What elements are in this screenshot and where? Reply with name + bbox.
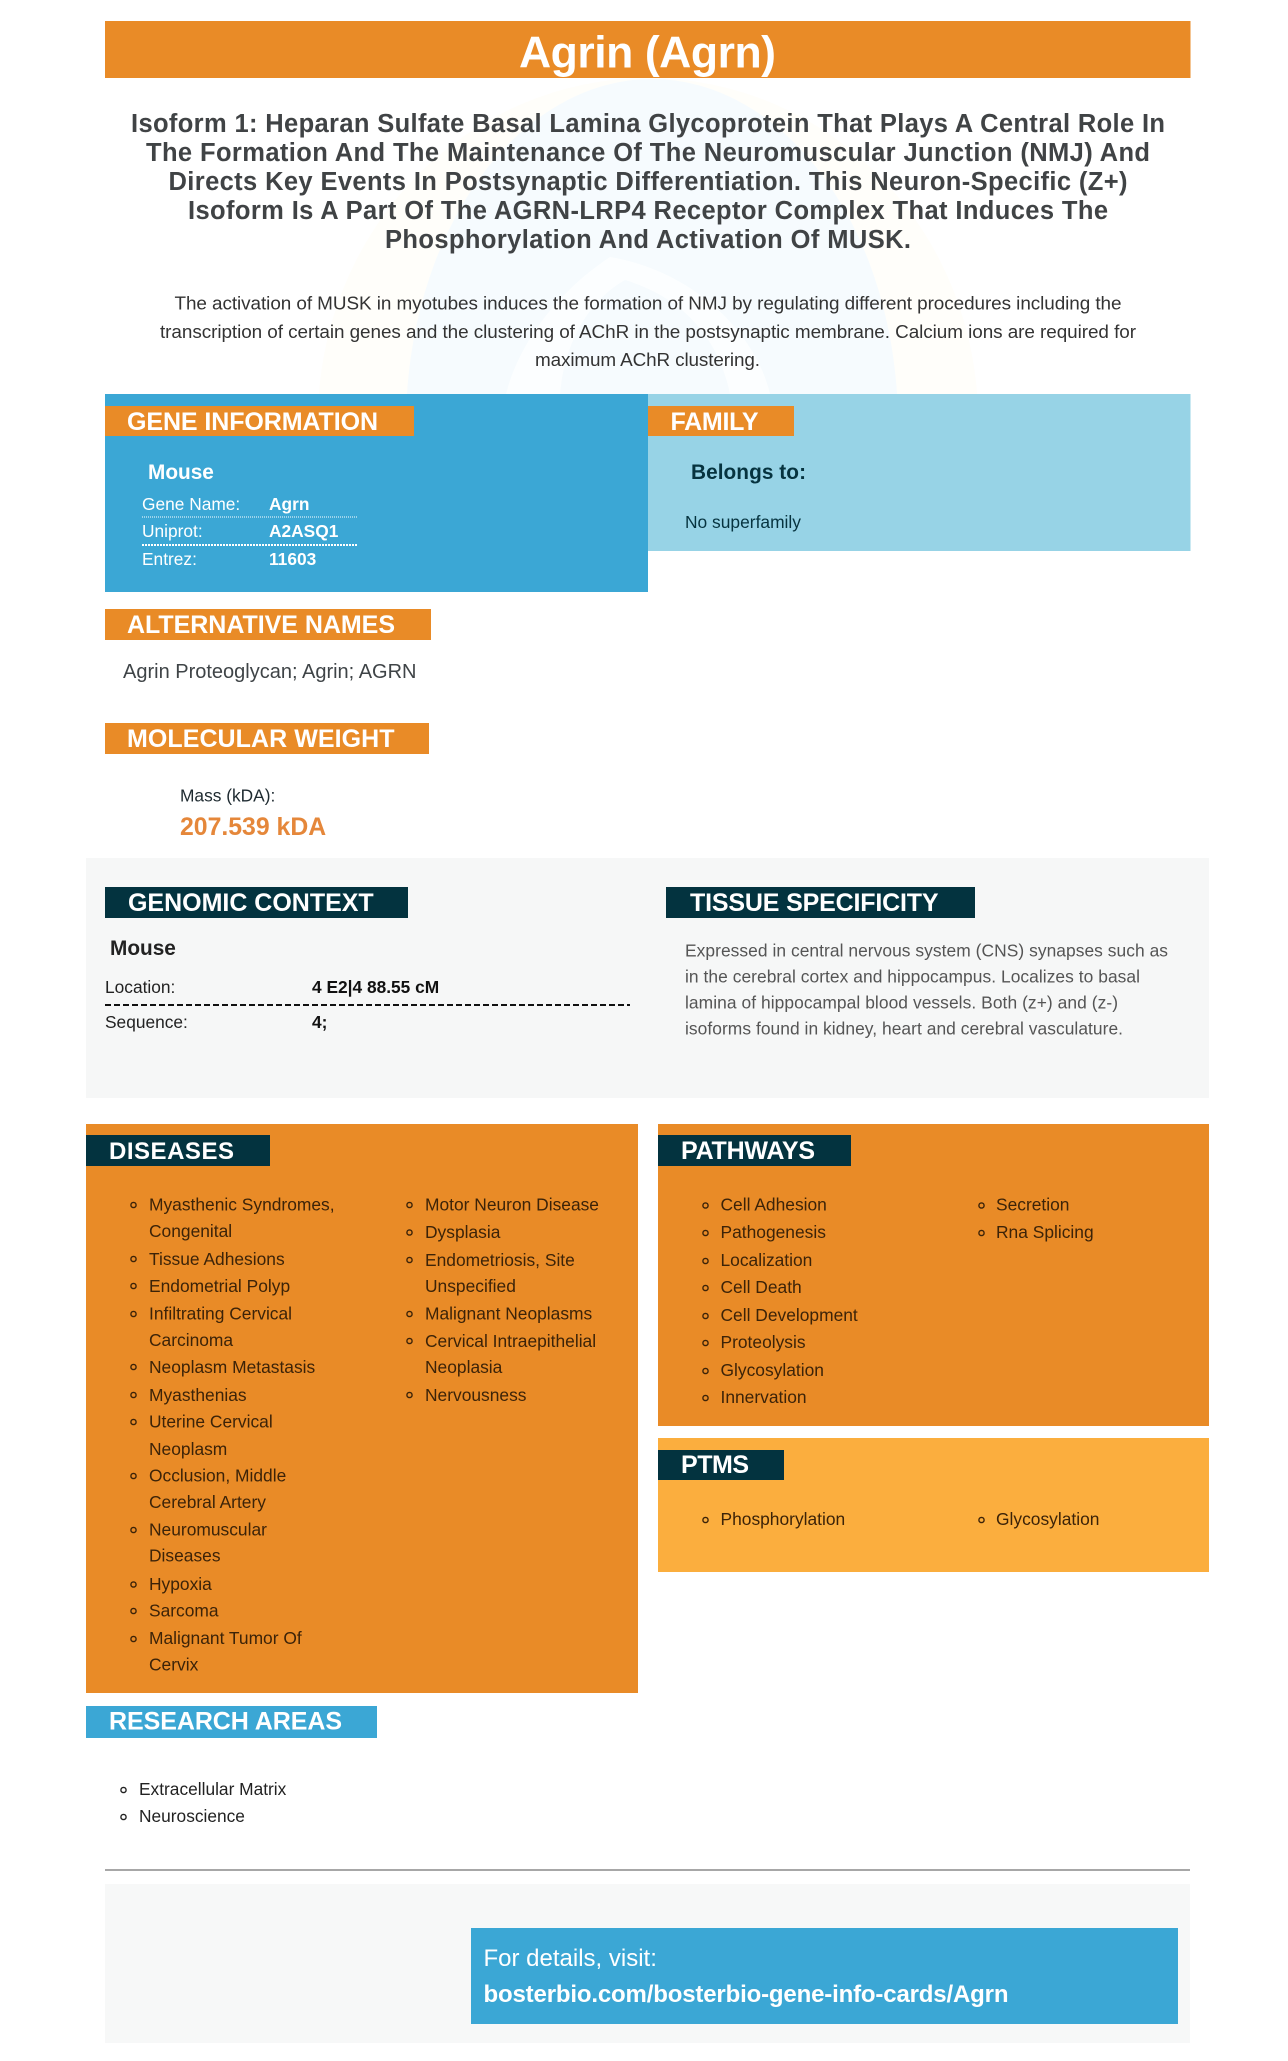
- diseases list column 1: [131, 1194, 335, 1674]
- diseases list column 1: Infiltrating Cervical: [149, 1304, 292, 1324]
- diseases list column 1: Diseases: [149, 1546, 221, 1566]
- pathways list column 1: Glycosylation: [720, 1360, 824, 1380]
- diseases list column 1: Tissue Adhesions: [149, 1249, 285, 1269]
- description paragraph: maximum AChR clustering.: [535, 350, 760, 371]
- pathways list column 1: Cell Adhesion: [720, 1194, 827, 1214]
- belongs to label: Belongs to:: [691, 461, 806, 484]
- species: mouse: Mouse: [110, 937, 176, 960]
- panel: diseases: [86, 1124, 638, 1693]
- subtitle heading: Directs Key Events In Postsynaptic Differentiation. This Neuron-Specific (Z+): [168, 168, 1128, 196]
- diseases list column 1: Hypoxia: [149, 1574, 212, 1594]
- diseases list column 1: Cervix: [149, 1654, 199, 1674]
- title banner: [105, 21, 1190, 78]
- pathways list column 2: Rna Splicing: [996, 1222, 1094, 1242]
- diseases list column 2: Malignant Neoplasms: [425, 1304, 593, 1324]
- description paragraph: The activation of MUSK in myotubes induces the formation of NMJ by regulating different procedures including the: [174, 294, 1122, 314]
- diseases list column 2: Neoplasia: [425, 1357, 503, 1377]
- callout: details link: bosterbio.com/bosterbio-gene-info-cards/Agrn: [484, 1981, 1008, 2008]
- molecular mass value: Mass (kDA):: [180, 786, 275, 806]
- diseases list column 2: Nervousness: [425, 1385, 527, 1405]
- panel: pathways: [658, 1124, 1209, 1426]
- gene info table: Entrez:: [142, 549, 197, 569]
- background watermark: [407, 79, 897, 394]
- gene info table: Uniprot:: [142, 521, 203, 541]
- genomic table: 4 E2|4 88.55 cM: [312, 977, 439, 997]
- tissue specificity text: [685, 940, 1168, 1038]
- heading: alternative names: ALTERNATIVE NAMES: [127, 611, 395, 639]
- pathways list column 1: [703, 1194, 858, 1407]
- pathways list column 2: [979, 1194, 1094, 1242]
- pathways list column 1: Innervation: [720, 1387, 807, 1407]
- gene info table: [142, 494, 357, 569]
- heading: research areas: RESEARCH AREAS: [109, 1708, 342, 1736]
- diseases list column 2: Unspecified: [425, 1276, 516, 1296]
- subtitle heading: The Formation And The Maintenance Of The Neuromuscular Junction (NMJ) And: [146, 139, 1150, 167]
- callout: details link: [471, 1928, 1178, 2024]
- panel: ptms: [658, 1438, 1209, 1572]
- diseases list column 1: Uterine Cervical: [149, 1412, 273, 1432]
- heading: ptms: PTMS: [681, 1451, 749, 1479]
- heading: diseases: [86, 1135, 270, 1166]
- heading: pathways: PATHWAYS: [681, 1137, 815, 1165]
- genomic table: 4;: [312, 1012, 327, 1032]
- tissue specificity text: in the cerebral cortex and hippocampus. Localizes to basal: [685, 966, 1140, 986]
- gene info table: Gene Name:: [142, 494, 240, 514]
- subtitle heading: Isoform Is A Part Of The AGRN-LRP4 Receptor Complex That Induces The: [188, 197, 1108, 225]
- diseases list column 2: Cervical Intraepithelial: [425, 1331, 596, 1351]
- molecular mass value: [180, 786, 326, 841]
- panel: family: [648, 394, 1190, 551]
- tissue specificity text: isoforms found in kidney, heart and cerebral vasculature.: [685, 1018, 1123, 1038]
- heading: family: [648, 406, 794, 436]
- research areas list: Neuroscience: [139, 1806, 245, 1826]
- diseases list column 1: Occlusion, Middle: [149, 1466, 286, 1486]
- panel: genomic context and tissue specificity: [86, 858, 1209, 1098]
- subtitle heading: Isoform 1: Heparan Sulfate Basal Lamina Glycoprotein That Plays A Central Role In: [131, 110, 1165, 138]
- tissue specificity text: lamina of hippocampal blood vessels. Both (z+) and (z-): [685, 992, 1118, 1012]
- research areas list: [121, 1779, 287, 1826]
- heading: pathways: [658, 1135, 851, 1166]
- diseases list column 1: Myasthenic Syndromes,: [149, 1194, 335, 1214]
- heading: diseases: DISEASES: [109, 1138, 234, 1165]
- subtitle heading: Phosphorylation And Activation Of MUSK.: [385, 226, 911, 254]
- description paragraph: [160, 294, 1136, 371]
- diseases list column 1: Myasthenias: [149, 1385, 247, 1405]
- gene info table: 11603: [269, 549, 317, 569]
- panel: footer: [105, 1884, 1190, 2043]
- ptms list: Glycosylation: [996, 1509, 1099, 1529]
- species: mouse: Mouse: [148, 461, 214, 484]
- diseases list column 1: Endometrial Polyp: [149, 1276, 290, 1296]
- gene info table: Agrn: [269, 494, 309, 514]
- heading: gene information: GENE INFORMATION: [127, 408, 378, 436]
- diseases list column 1: Neoplasm: [149, 1439, 227, 1459]
- heading: ptms: [658, 1450, 784, 1480]
- genomic table: Sequence:: [105, 1012, 188, 1032]
- heading: genomic context: GENOMIC CONTEXT: [128, 889, 374, 917]
- heading: molecular weight: MOLECULAR WEIGHT: [127, 725, 394, 753]
- tissue specificity text: Expressed in central nervous system (CNS) synapses such as: [685, 940, 1168, 960]
- diseases list column 2: [407, 1194, 599, 1405]
- diseases list column 2: Motor Neuron Disease: [425, 1194, 599, 1214]
- pathways list column 2: Secretion: [996, 1194, 1069, 1214]
- description paragraph: transcription of certain genes and the clustering of AChR in the postsynaptic membrane. Calcium ions are required for: [160, 322, 1136, 343]
- panel: gene information: [105, 394, 648, 592]
- title banner: Agrin (Agrn): [519, 29, 776, 78]
- diseases list column 1: Neuromuscular: [149, 1520, 267, 1540]
- diseases list column 1: Cerebral Artery: [149, 1492, 266, 1512]
- diseases list column 1: Carcinoma: [149, 1330, 233, 1350]
- pathways list column 1: Cell Development: [720, 1305, 858, 1325]
- diseases list column 1: Malignant Tumor Of: [149, 1628, 302, 1648]
- genomic table: [105, 977, 630, 1032]
- ptms list: [703, 1509, 1099, 1529]
- pathways list column 1: Pathogenesis: [720, 1222, 826, 1242]
- alternative names text: Agrin Proteoglycan; Agrin; AGRN: [123, 661, 416, 683]
- research areas list: Extracellular Matrix: [139, 1779, 287, 1799]
- molecular mass value: 207.539 kDA: [180, 814, 326, 841]
- pathways list column 1: Localization: [720, 1250, 812, 1270]
- genomic table: Location:: [105, 977, 175, 997]
- callout: details link: For details, visit:: [484, 1945, 657, 1972]
- diseases list column 2: Dysplasia: [425, 1222, 501, 1242]
- ptms list: Phosphorylation: [720, 1509, 845, 1529]
- gene info table: A2ASQ1: [269, 521, 339, 541]
- family value: No superfamily: [685, 512, 801, 532]
- heading: family: FAMILY: [670, 408, 759, 436]
- heading: tissue specificity: TISSUE SPECIFICITY: [690, 889, 939, 917]
- subtitle heading: [131, 110, 1165, 254]
- diseases list column 1: Sarcoma: [149, 1600, 219, 1620]
- diseases list column 1: Neoplasm Metastasis: [149, 1357, 316, 1377]
- pathways list column 1: Cell Death: [720, 1277, 802, 1297]
- diseases list column 1: Congenital: [149, 1221, 232, 1241]
- diseases list column 2: Endometriosis, Site: [425, 1250, 575, 1270]
- pathways list column 1: Proteolysis: [720, 1332, 806, 1352]
